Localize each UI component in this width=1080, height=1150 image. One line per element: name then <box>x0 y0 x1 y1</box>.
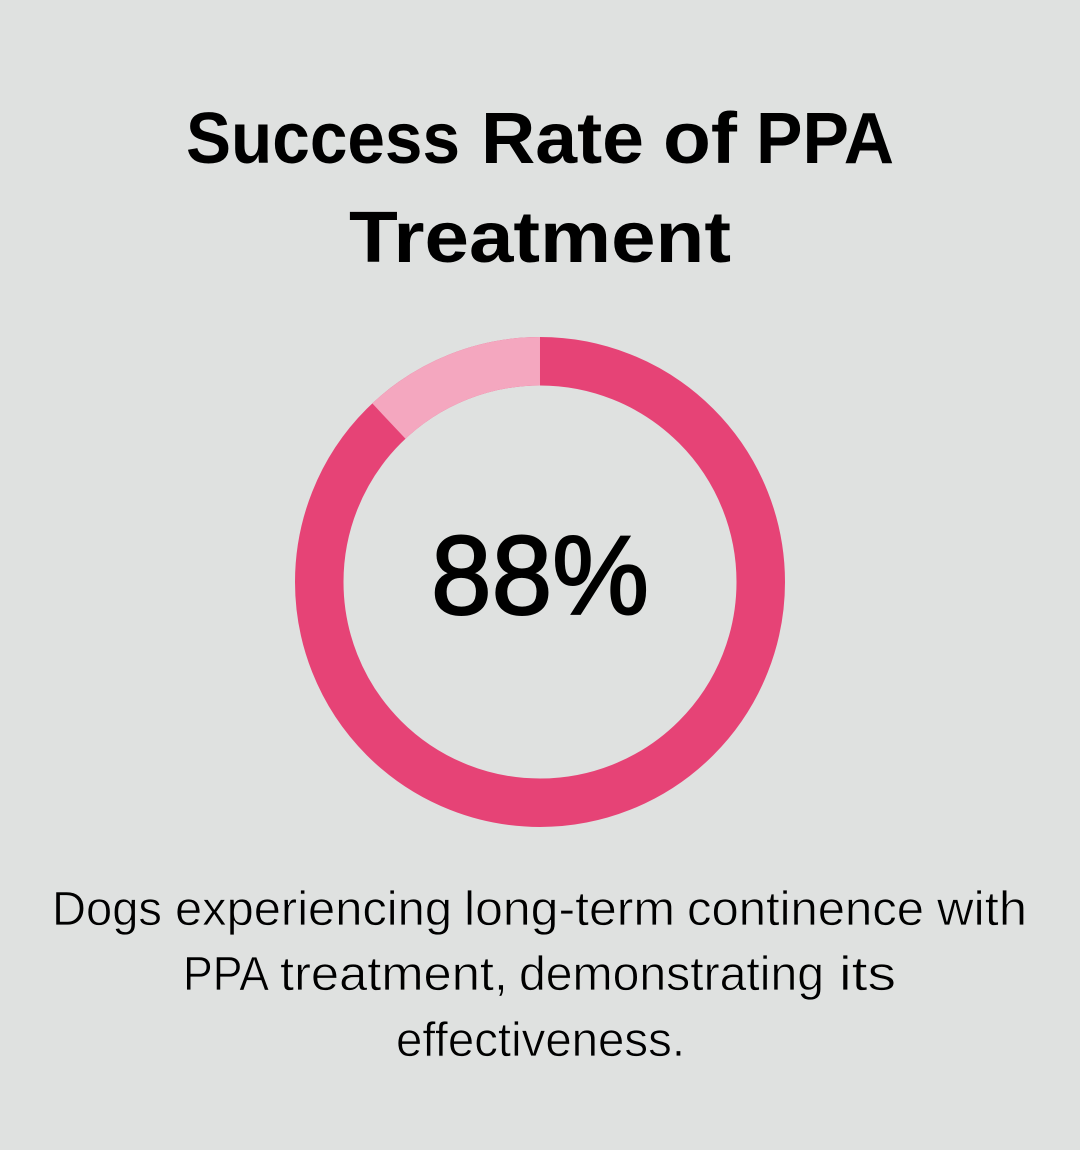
caption: Dogs <box>52 883 162 936</box>
caption: with <box>936 883 1027 936</box>
caption <box>52 883 1027 1067</box>
center value: 88% <box>431 513 649 638</box>
title: Rate <box>481 99 644 179</box>
caption: PPA <box>183 948 269 1001</box>
caption: effectiveness. <box>396 1014 685 1067</box>
caption: experiencing <box>175 883 452 936</box>
caption: its <box>839 948 896 1001</box>
caption: treatment, <box>280 948 508 1001</box>
title <box>186 99 894 278</box>
donut chart: 88% <box>319 361 761 803</box>
title: Treatment <box>349 198 731 278</box>
caption: long-term <box>464 883 675 936</box>
title: PPA <box>756 99 894 179</box>
title: Success <box>186 99 460 179</box>
caption: demonstrating <box>519 948 824 1001</box>
title: of <box>663 99 738 179</box>
caption: continence <box>687 883 924 936</box>
remaining 12% segment <box>389 361 540 421</box>
